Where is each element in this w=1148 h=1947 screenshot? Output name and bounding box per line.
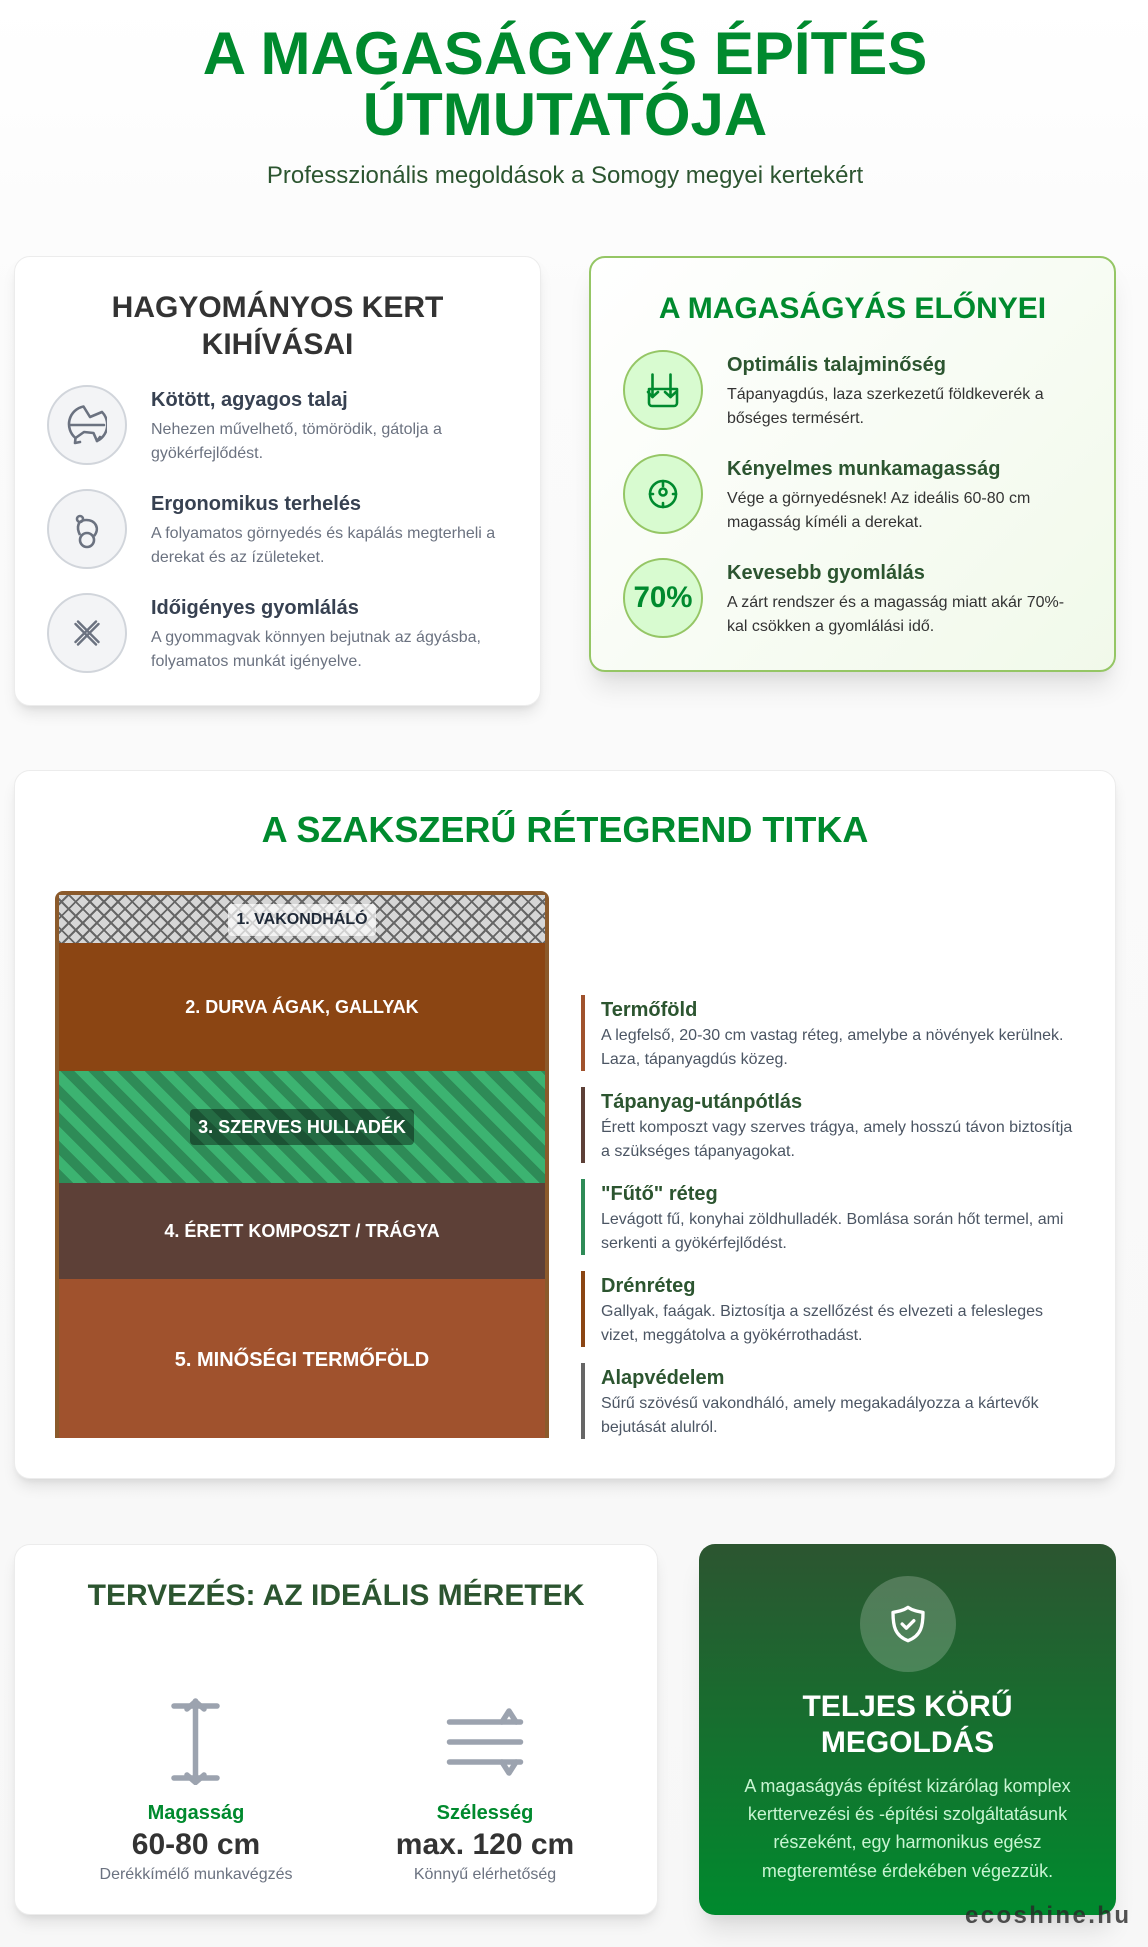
heading: challenges: HAGYOMÁNYOS KERT — [112, 291, 443, 324]
heading: complete solution — [802, 1690, 1013, 1759]
label: mesh — [228, 904, 376, 936]
legend: heating layer: "Fűtő" réteg — [601, 1183, 718, 1205]
layer 4: compost: 4. ÉRETT KOMPOSZT / TRÁGYA — [164, 1221, 440, 1241]
watermark: ecoshine.hu — [965, 1902, 1131, 1929]
text: complete solution: részeként, egy harmonikus egész — [773, 1832, 1042, 1852]
note: height: Derékkímélő munkavégzés — [100, 1866, 292, 1883]
label: organic waste — [190, 1109, 414, 1145]
text: compacted soil: Kötött, agyagos talaj — [151, 389, 348, 411]
text: working height: Vége a görnyedésnek! Az ideális 60-80 cm — [727, 490, 1030, 507]
text: complete solution: A magaságyás építést kizárólag komplex — [744, 1776, 1071, 1796]
dimension: width — [396, 1708, 574, 1883]
heading: dimensions: TERVEZÉS: AZ IDEÁLIS MÉRETEK — [88, 1579, 584, 1612]
panel: challenges of traditional garden — [14, 256, 541, 706]
text: soil quality — [727, 354, 1044, 427]
label: height: Magasság — [148, 1802, 244, 1824]
value: height: 60-80 cm — [132, 1828, 260, 1861]
text: weeding: A gyommagvak könnyen bejutnak az ágyásba, — [151, 629, 481, 646]
text: compacted soil: Nehezen művelhető, tömörödik, gátolja a — [151, 421, 442, 438]
legend: heating layer: Levágott fű, konyhai zöldhulladék. Bomlása során hőt termel, ami — [601, 1211, 1063, 1228]
text: working height: magasság kíméli a derekat. — [727, 514, 923, 531]
raised bed cross-section diagram — [55, 891, 549, 1438]
legend: base protection: Sűrű szövésű vakondháló, amely megakadályozza a kártevők — [601, 1395, 1039, 1412]
layer 2: coarse branches: 2. DURVA ÁGAK, GALLYAK — [185, 997, 419, 1017]
layer 4: compost — [59, 1183, 545, 1279]
legend: drainage — [581, 1271, 1081, 1347]
layer 1: mesh — [59, 895, 545, 943]
legend: topsoil — [581, 995, 1081, 1071]
panel: raised bed benefits — [589, 256, 1116, 672]
legend: heating layer — [581, 1179, 1081, 1255]
text: compacted soil — [151, 389, 442, 462]
text: ergonomic strain — [151, 493, 496, 566]
icon: width lines — [446, 1708, 524, 1776]
heading: complete solution: TELJES KÖRŰ — [802, 1690, 1013, 1723]
icon: ergonomic strain — [47, 489, 127, 569]
text: less weeding: A zárt rendszer és a magasság miatt akár 70%- — [727, 594, 1064, 611]
dimension: height — [100, 1698, 292, 1883]
heading: benefits: A MAGASÁGYÁS ELŐNYEI — [659, 292, 1046, 325]
legend: topsoil: A legfelső, 20-30 cm vastag réteg, amelybe a növények kerülnek. — [601, 1027, 1063, 1044]
label: mesh: 1. VAKONDHÁLÓ — [236, 911, 368, 928]
legend: drainage: Drénréteg — [601, 1275, 695, 1297]
icon: soil quality — [623, 350, 703, 430]
icon: 70 percent — [623, 558, 703, 638]
text: less weeding: kal csökken a gyomlálási idő. — [727, 618, 934, 635]
text: working height — [727, 458, 1030, 531]
panel: complete solution — [699, 1544, 1116, 1915]
legend: heating layer: serkenti a gyökérfejlődést. — [601, 1235, 787, 1252]
heading: challenges — [112, 290, 443, 361]
title: A MAGASÁGYÁS ÉPÍTÉS — [203, 20, 927, 87]
text: soil quality: Tápanyagdús, laza szerkezetű földkeverék a — [727, 386, 1044, 403]
value: width: max. 120 cm — [396, 1828, 574, 1861]
icon: weeding cross — [47, 593, 127, 673]
text: complete solution: kerttervezési és -építési szolgáltatásunk — [748, 1804, 1067, 1824]
label: organic waste: 3. SZERVES HULLADÉK — [198, 1117, 406, 1137]
heading: layers: A SZAKSZERŰ RÉTEGREND TITKA — [262, 809, 868, 850]
heading: complete solution: MEGOLDÁS — [821, 1726, 994, 1759]
text: soil quality: bőséges termésért. — [727, 410, 864, 427]
legend: topsoil: Laza, tápanyagdús közeg. — [601, 1051, 788, 1068]
text: weeding — [151, 597, 481, 670]
icon: 70 percent: 70% — [633, 581, 693, 614]
text: complete solution — [744, 1776, 1071, 1881]
legend: base protection — [581, 1363, 1081, 1439]
title — [203, 20, 927, 148]
layer 3: organic waste — [59, 1071, 545, 1183]
heading: challenges: KIHÍVÁSAI — [202, 328, 353, 361]
text: ergonomic strain: A folyamatos görnyedés és kapálás megterheli a — [151, 525, 495, 542]
icon: height arrow — [171, 1698, 220, 1785]
legend: topsoil: Termőföld — [601, 999, 697, 1021]
icon: compacted soil — [47, 385, 127, 465]
text: weeding: folyamatos munkát igényelve. — [151, 653, 362, 670]
legend: base protection: bejutását alulról. — [601, 1419, 718, 1436]
legend: nutrients: Érett komposzt vagy szerves trágya, amely hosszú távon biztosítja — [601, 1119, 1072, 1136]
panel: ideal dimensions — [14, 1544, 658, 1915]
layer 2: coarse branches — [59, 943, 545, 1071]
title: ÚTMUTATÓJA — [363, 81, 767, 148]
legend: base protection: Alapvédelem — [601, 1367, 724, 1389]
layer 5: topsoil — [59, 1279, 545, 1438]
text: less weeding: Kevesebb gyomlálás — [727, 562, 925, 584]
text: less weeding — [727, 562, 1064, 635]
icon: working height — [623, 454, 703, 534]
subtitle: Professzionális megoldások a Somogy megyei kertekért — [267, 162, 863, 189]
panel: layers — [14, 770, 1116, 1479]
icon: shield check — [860, 1576, 956, 1672]
legend: nutrients — [581, 1087, 1081, 1163]
text: soil quality: Optimális talajminőség — [727, 354, 946, 376]
note: width: Könnyű elérhetőség — [414, 1866, 556, 1883]
text: compacted soil: gyökérfejlődést. — [151, 445, 263, 462]
label: width: Szélesség — [437, 1802, 533, 1824]
legend: drainage: vizet, meggátolva a gyökérrothadást. — [601, 1327, 862, 1344]
text: complete solution: megteremtése érdekében végezzük. — [762, 1861, 1053, 1881]
layer 5: topsoil: 5. MINŐSÉGI TERMŐFÖLD — [175, 1349, 429, 1371]
legend: nutrients: Tápanyag-utánpótlás — [601, 1091, 802, 1113]
text: ergonomic strain: derekat és az ízületeket. — [151, 549, 324, 566]
text: weeding: Időigényes gyomlálás — [151, 597, 359, 619]
legend: nutrients: a szükséges tápanyagokat. — [601, 1143, 795, 1160]
text: ergonomic strain: Ergonomikus terhelés — [151, 493, 361, 515]
legend: drainage: Gallyak, faágak. Biztosítja a szellőzést és elvezeti a felesleges — [601, 1303, 1043, 1320]
text: working height: Kényelmes munkamagasság — [727, 458, 1000, 480]
